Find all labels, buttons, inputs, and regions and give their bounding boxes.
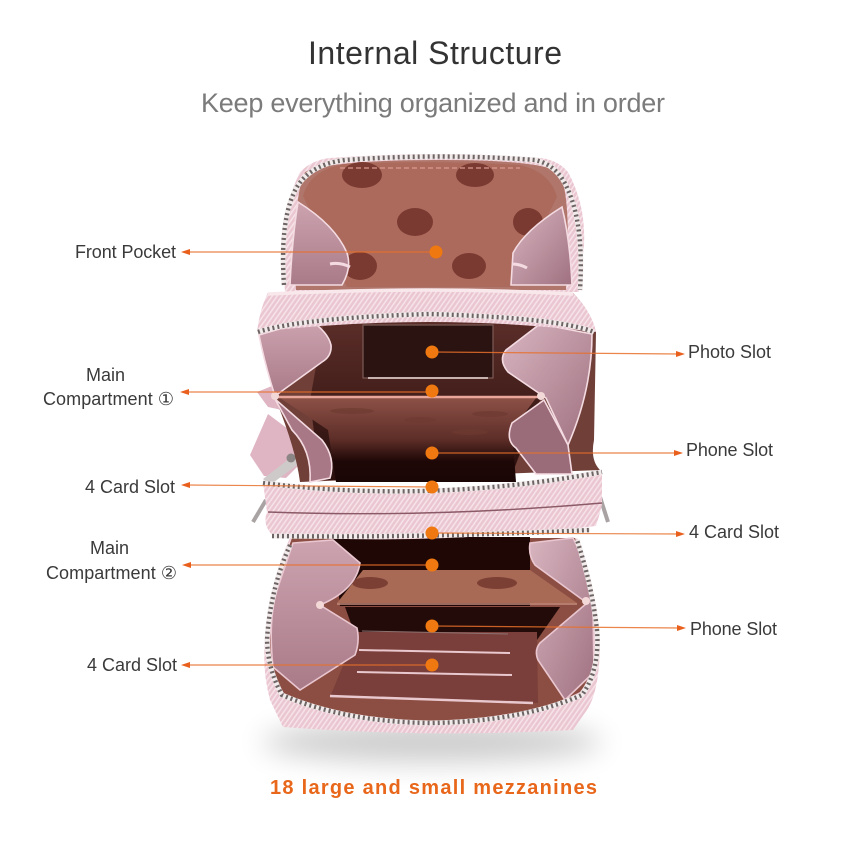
lower body and compartment two	[264, 537, 600, 733]
pocket side flaps	[290, 202, 349, 285]
subtitle: Keep everything organized and in order	[201, 88, 665, 118]
callout: Phone Slot lower	[426, 619, 777, 639]
callout: Front Pocket: Front Pocket	[75, 242, 176, 262]
callout: 4 Card Slot right	[426, 522, 779, 542]
callout: Photo Slot	[426, 342, 771, 362]
callout: Photo Slot: Photo Slot	[688, 342, 771, 362]
callout: Main Compartment 1	[43, 365, 438, 409]
callout: Phone Slot upper	[426, 440, 773, 460]
callout: Main Compartment 2: Main	[90, 538, 129, 558]
polka dots	[342, 162, 543, 280]
strap tab and metal rings	[250, 386, 608, 522]
title: Internal Structure	[308, 35, 562, 71]
right gusset	[530, 538, 594, 700]
front pocket section	[282, 154, 584, 292]
callout: Main Compartment 1: Compartment ①	[43, 389, 174, 409]
photo window	[363, 325, 493, 378]
brown card divider	[337, 570, 577, 603]
callout: Front Pocket	[75, 242, 442, 262]
callout: Main Compartment 1: Main	[86, 365, 125, 385]
wallet bag photo illustration	[250, 154, 608, 762]
footer note: 18 large and small mezzanines	[270, 777, 597, 799]
main compartment one	[258, 288, 600, 482]
callout: Phone Slot upper: Phone Slot	[686, 440, 773, 460]
left gusset	[271, 540, 360, 690]
card pocket inner panel	[280, 398, 536, 482]
callout: Phone Slot lower: Phone Slot	[690, 619, 777, 639]
middle zipper bands	[263, 472, 602, 539]
callout: 4 Card Slot left upper	[85, 477, 438, 497]
bag shadow	[262, 722, 602, 762]
callout: 4 Card Slot left lower: 4 Card Slot	[87, 655, 177, 675]
callout: 4 Card Slot left lower	[87, 655, 438, 675]
upper zipper band	[257, 290, 596, 332]
callout: 4 Card Slot left upper: 4 Card Slot	[85, 477, 175, 497]
callout: 4 Card Slot right: 4 Card Slot	[689, 522, 779, 542]
card slots panel	[330, 632, 538, 703]
right side gusset	[502, 324, 592, 445]
left side gusset	[259, 320, 331, 396]
callout: Main Compartment 2	[46, 538, 438, 583]
callout: Main Compartment 2: Compartment ②	[46, 563, 177, 583]
